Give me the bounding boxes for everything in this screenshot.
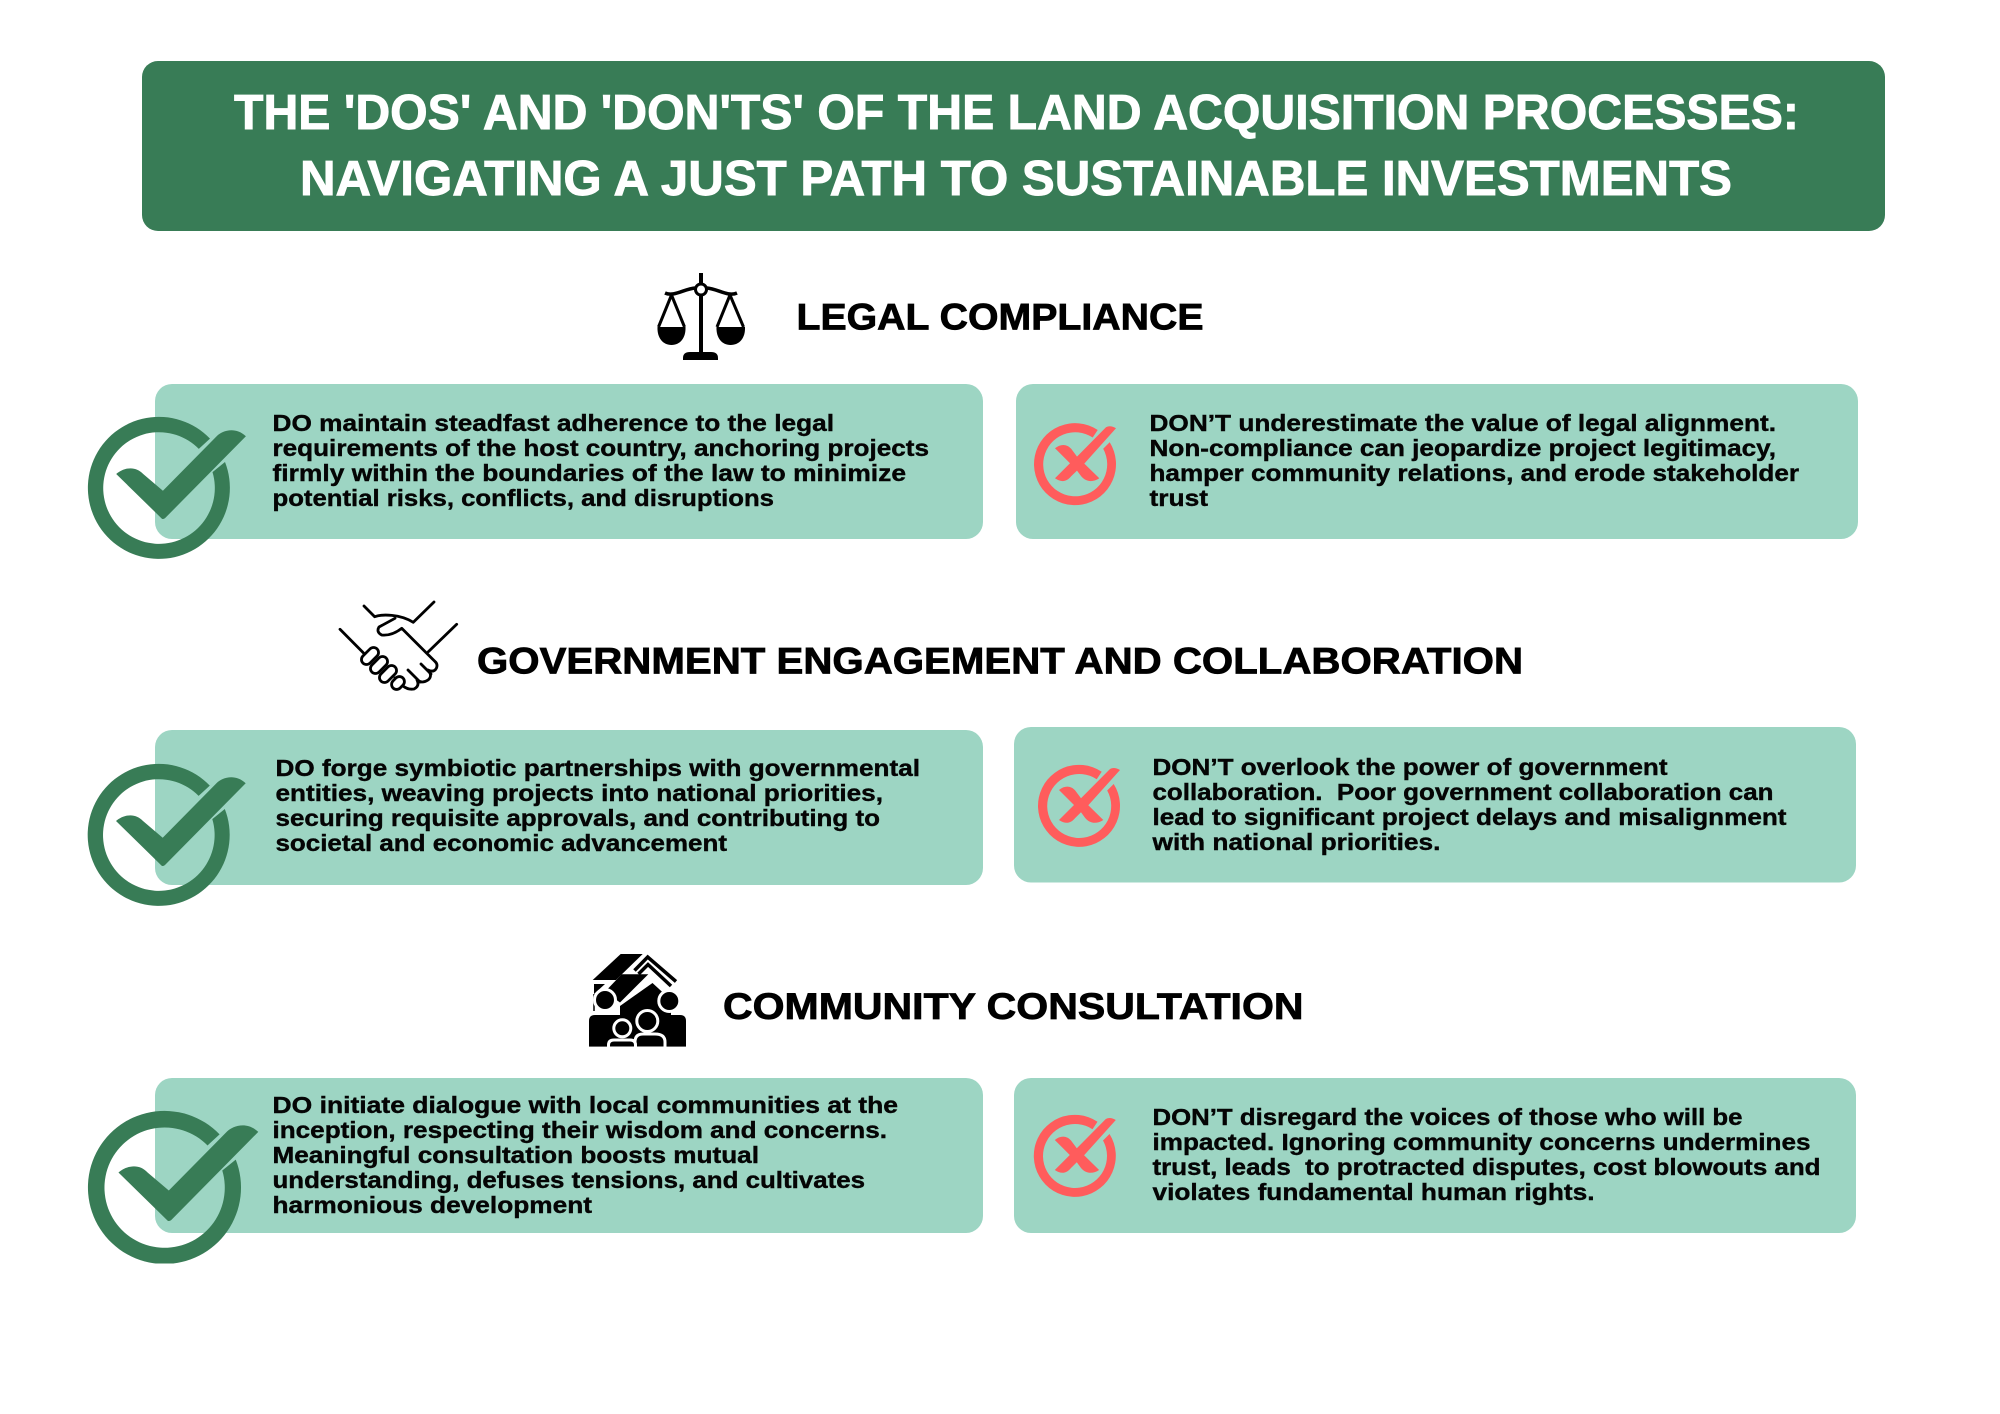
panel: legal DON'T [1016, 384, 1858, 539]
do text: DO maintain steadfast adherence to the legal [272, 410, 834, 436]
section heading: government engagement and collaboration [340, 602, 1523, 691]
panel: community DON'T [1014, 1078, 1856, 1233]
icon: red cross [1038, 765, 1120, 847]
section heading: legal compliance [657, 273, 1204, 360]
do text: entities, weaving projects into national priorities, [276, 780, 883, 806]
heading text: LEGAL COMPLIANCE [796, 296, 1204, 338]
do text: societal and economic advancement [276, 830, 727, 856]
do text: understanding, defuses tensions, and cultivates [272, 1167, 865, 1193]
panel: legal DO [88, 384, 983, 559]
do text: inception, respecting their wisdom and concerns. [272, 1117, 887, 1143]
panel background [155, 1078, 983, 1233]
panel background [1016, 384, 1858, 539]
icon: green check [88, 764, 246, 906]
title banner [142, 61, 1885, 231]
don't text: DON’T overlook the power of government [1152, 754, 1668, 780]
do text: DO initiate dialogue with local communities at the [272, 1092, 898, 1118]
banner background [142, 61, 1885, 231]
don't text: Non-compliance can jeopardize project legitimacy, [1150, 435, 1776, 461]
don't text: violates fundamental human rights. [1152, 1179, 1594, 1205]
do text [272, 410, 929, 511]
don't text [1152, 1104, 1820, 1205]
don't text: trust, leads to protracted disputes, cost blowouts and [1152, 1154, 1820, 1180]
title text: THE 'DOS' AND 'DON'TS' OF THE LAND ACQUISITION PROCESSES: [234, 85, 1799, 140]
panel background [1014, 727, 1856, 882]
do text: Meaningful consultation boosts mutual [272, 1142, 759, 1168]
icon: green check [88, 417, 246, 559]
heading text: COMMUNITY CONSULTATION [723, 985, 1304, 1027]
icon: green check [88, 1111, 258, 1264]
section heading: community consultation [585, 954, 1304, 1051]
panel background [155, 384, 983, 539]
do text [272, 1092, 898, 1218]
don't text [1151, 754, 1787, 855]
icon: red cross [1034, 1115, 1116, 1197]
don't text: DON’T disregard the voices of those who will be [1152, 1104, 1742, 1130]
panel: government DON'T [1014, 727, 1856, 882]
panel background [1014, 1078, 1856, 1233]
icon: handshake [340, 602, 457, 691]
do text: harmonious development [272, 1192, 592, 1218]
do text: potential risks, conflicts, and disruptions [272, 485, 774, 511]
icon: scales of justice [657, 273, 745, 360]
don't text: DON’T underestimate the value of legal alignment. [1150, 410, 1776, 436]
title text [234, 85, 1799, 206]
don't text: trust [1150, 485, 1208, 511]
heading text: GOVERNMENT ENGAGEMENT AND COLLABORATION [477, 640, 1523, 682]
do text: requirements of the host country, anchoring projects [272, 435, 929, 461]
do text: DO forge symbiotic partnerships with governmental [276, 755, 920, 781]
do text [276, 755, 920, 856]
icon: family and house [585, 954, 690, 1051]
don't text: with national priorities. [1151, 829, 1440, 855]
don't text [1150, 410, 1799, 511]
don't text: impacted. Ignoring community concerns undermines [1152, 1129, 1810, 1155]
icon: red cross [1034, 423, 1116, 505]
panel background [155, 730, 983, 885]
panel: government DO [88, 730, 983, 906]
don't text: lead to significant project delays and misalignment [1152, 804, 1787, 830]
panel: community DO [88, 1078, 983, 1264]
do text: firmly within the boundaries of the law to minimize [272, 460, 906, 486]
don't text: hamper community relations, and erode stakeholder [1150, 460, 1799, 486]
do text: securing requisite approvals, and contributing to [276, 805, 880, 831]
don't text: collaboration. Poor government collaboration can [1152, 779, 1774, 805]
title text: NAVIGATING A JUST PATH TO SUSTAINABLE INVESTMENTS [300, 151, 1732, 206]
